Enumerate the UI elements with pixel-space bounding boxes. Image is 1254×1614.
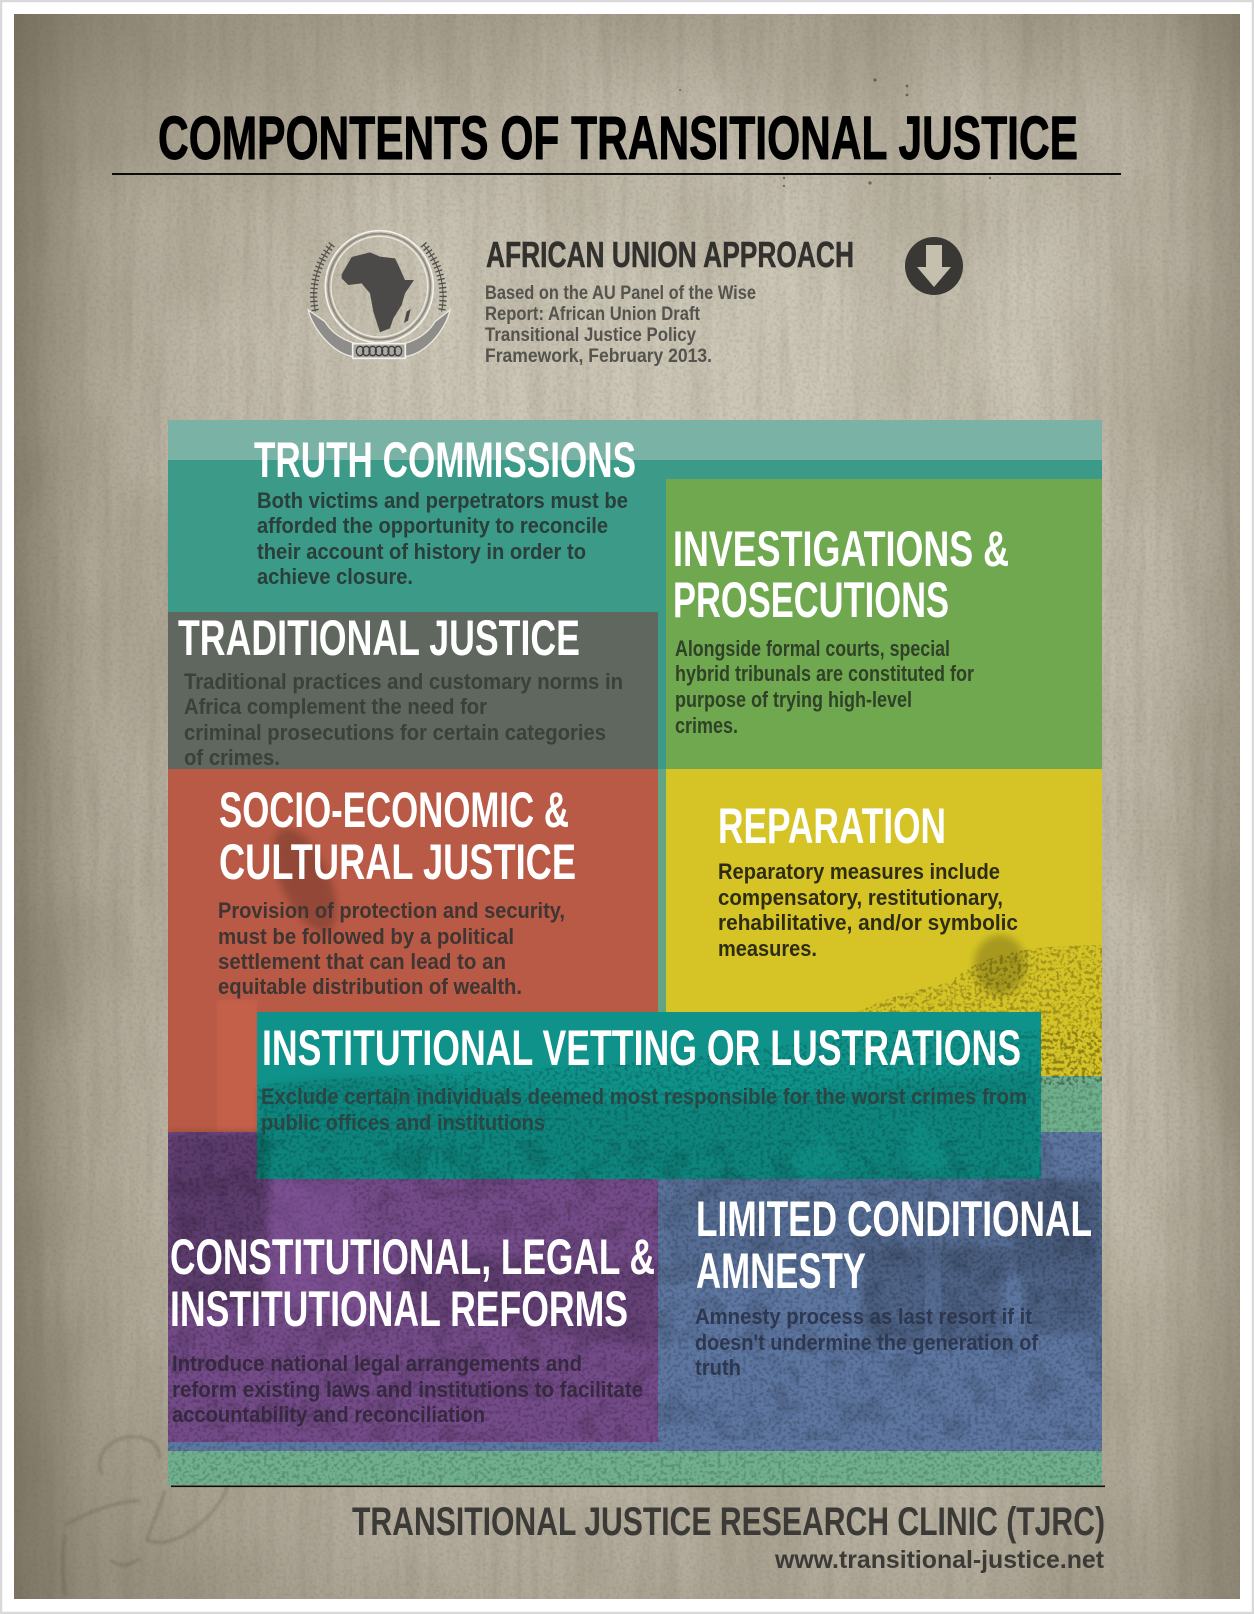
text: reparation: Reparatory measures include xyxy=(718,859,1000,884)
text: traditional justice: criminal prosecutions for certain categories xyxy=(184,720,606,745)
text: traditional justice: Traditional practices and customary norms in xyxy=(184,669,623,694)
strip right of vetting panel xyxy=(1041,1076,1102,1132)
source note: Report: African Union Draft xyxy=(485,304,701,325)
heading: reparation: REPARATION xyxy=(718,798,946,854)
panel: socio-economic and cultural justice xyxy=(168,769,658,1132)
text: limited conditional amnesty xyxy=(695,1304,1039,1380)
heading: traditional justice: TRADITIONAL JUSTICE xyxy=(178,610,580,666)
text: traditional justice: Africa complement the need for xyxy=(184,694,487,719)
panel: limited conditional amnesty xyxy=(168,1132,1102,1451)
icon: African Union emblem xyxy=(308,231,450,358)
heading: socio-economic and cultural justice: CULTURAL JUSTICE xyxy=(219,834,576,890)
text: investigations and prosecutions: crimes. xyxy=(675,713,738,738)
heading: constitutional, legal and institutional reforms xyxy=(170,1229,655,1337)
strip between red and yellow panels xyxy=(658,769,666,1012)
text: socio-economic and cultural justice: settlement that can lead to an xyxy=(218,949,506,974)
text: reparation xyxy=(718,859,1018,961)
heading: constitutional, legal and institutional reforms: CONSTITUTIONAL, LEGAL & xyxy=(170,1229,655,1285)
panel: traditional justice xyxy=(168,610,658,770)
text: reparation: rehabilitative, and/or symbolic xyxy=(718,910,1018,935)
text: limited conditional amnesty: doesn't undermine the generation of xyxy=(695,1330,1039,1355)
text: constitutional, legal and institutional reforms: accountability and reconciliation xyxy=(172,1402,485,1427)
text: truth commissions xyxy=(257,488,628,589)
footer: website: www.transitional-justice.net xyxy=(774,1546,1105,1574)
heading: limited conditional amnesty: LIMITED CONDITIONAL xyxy=(696,1191,1092,1247)
heading: investigations and prosecutions: PROSECUTIONS xyxy=(673,572,949,628)
panel: institutional vetting or lustrations xyxy=(257,1012,1041,1179)
text: truth commissions: achieve closure. xyxy=(257,564,413,589)
text: traditional justice: of crimes. xyxy=(184,745,280,770)
text: socio-economic and cultural justice: Provision of protection and security, xyxy=(218,898,565,923)
heading: socio-economic and cultural justice: SOCIO-ECONOMIC & xyxy=(219,782,569,838)
source note: Transitional Justice Policy xyxy=(485,325,696,346)
text: truth commissions: Both victims and perpetrators must be xyxy=(257,488,628,513)
text: constitutional, legal and institutional reforms: Introduce national legal arrangements and xyxy=(172,1351,582,1376)
text: traditional justice xyxy=(184,669,623,770)
source note: Based on the AU Panel of the Wise xyxy=(485,283,756,304)
text: investigations and prosecutions: purpose of trying high-level xyxy=(675,687,912,712)
text: limited conditional amnesty: Amnesty process as last resort if it xyxy=(695,1304,1033,1329)
text: truth commissions: their account of history in order to xyxy=(257,539,586,564)
heading: limited conditional amnesty: AMNESTY xyxy=(696,1243,866,1299)
text: socio-economic and cultural justice: must be followed by a political xyxy=(218,924,514,949)
panel: investigations and prosecutions xyxy=(666,479,1102,769)
footer rule xyxy=(171,1486,1105,1487)
text: reparation: measures. xyxy=(718,936,817,961)
text: truth commissions: afforded the opportunity to reconcile xyxy=(257,513,608,538)
panel: constitutional, legal and institutional reforms xyxy=(168,1132,658,1442)
source note xyxy=(485,283,756,367)
text: socio-economic and cultural justice xyxy=(218,898,565,999)
text: socio-economic and cultural justice: equitable distribution of wealth. xyxy=(218,974,522,999)
heading: African Union approach: AFRICAN UNION APPROACH xyxy=(486,234,854,275)
text: constitutional, legal and institutional reforms: reform existing laws and institutions to facilitate xyxy=(172,1377,643,1402)
text: investigations and prosecutions: Alongside formal courts, special xyxy=(675,636,950,661)
text: institutional vetting or lustrations xyxy=(261,1084,1027,1135)
panel: truth commissions xyxy=(168,432,1102,769)
text: limited conditional amnesty: truth xyxy=(695,1355,741,1380)
text: constitutional, legal and institutional reforms xyxy=(172,1351,643,1427)
panel: reparation xyxy=(666,769,1102,1076)
icon: down arrow xyxy=(905,237,963,295)
heading: constitutional, legal and institutional reforms: INSTITUTIONAL REFORMS xyxy=(170,1281,628,1337)
title rule xyxy=(112,173,1121,175)
source note: Framework, February 2013. xyxy=(485,346,712,367)
panel: footer band xyxy=(168,1451,1102,1485)
heading: investigations and prosecutions: INVESTIGATIONS & xyxy=(673,521,1009,577)
heading: investigations and prosecutions xyxy=(673,521,1009,628)
heading: truth commissions: TRUTH COMMISSIONS xyxy=(254,432,636,488)
heading: socio-economic and cultural justice xyxy=(219,782,576,890)
text: institutional vetting or lustrations: public offices and institutions xyxy=(261,1110,545,1135)
heading: limited conditional amnesty xyxy=(696,1191,1092,1299)
panel: header band xyxy=(168,420,1102,460)
text: investigations and prosecutions: hybrid tribunals are constituted for xyxy=(675,661,974,686)
photo layer beneath the colour blocks xyxy=(168,420,1102,1485)
text: investigations and prosecutions xyxy=(675,636,974,738)
text: reparation: compensatory, restitutionary, xyxy=(718,885,1003,910)
text: institutional vetting or lustrations: Exclude certain individuals deemed most responsible for the worst crimes from xyxy=(261,1084,1027,1109)
